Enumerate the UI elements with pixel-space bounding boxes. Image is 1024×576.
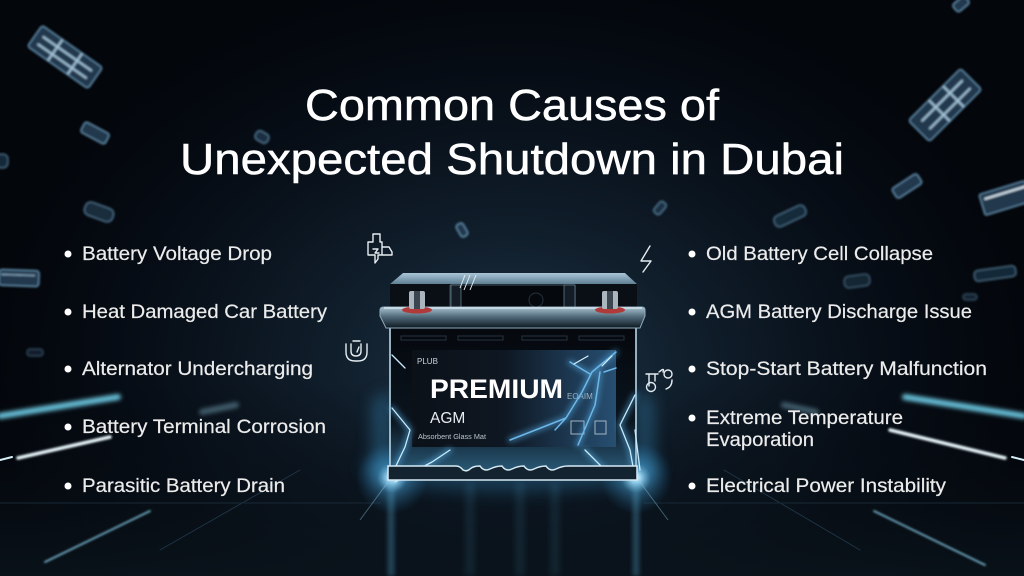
battery label xyxy=(412,350,616,447)
right list of causes: AGM Battery Discharge Issue xyxy=(706,301,972,323)
floating battery debris xyxy=(0,0,1024,356)
battery label: Absorbent Glass Mat xyxy=(418,434,486,441)
title: Unexpected Shutdown in Dubai xyxy=(180,135,844,184)
right list of causes xyxy=(688,243,987,497)
left list of causes: Battery Terminal Corrosion xyxy=(82,416,326,438)
battery label: AGM xyxy=(430,410,465,427)
battery top lid xyxy=(380,273,645,328)
right list of causes: Old Battery Cell Collapse xyxy=(706,243,933,265)
left list of causes xyxy=(64,243,327,497)
lightning xyxy=(392,352,640,482)
left list of causes: Battery Voltage Drop xyxy=(82,243,272,265)
right list of causes: Evaporation xyxy=(706,429,814,451)
battery label: PREMIUM xyxy=(430,374,563,404)
light streaks xyxy=(0,397,1024,565)
battery body xyxy=(390,326,636,472)
battery glow xyxy=(345,390,690,576)
battery label: EOAIM xyxy=(567,392,593,401)
right list of causes: Electrical Power Instability xyxy=(706,475,946,497)
icon: plug and car xyxy=(368,234,392,263)
battery xyxy=(380,273,645,482)
right list of causes: Stop-Start Battery Malfunction xyxy=(706,358,987,380)
left list of causes: Heat Damaged Car Battery xyxy=(82,301,327,323)
title: Common Causes of xyxy=(305,81,720,130)
icon: gauge shield xyxy=(346,341,367,361)
icon: lightning bolt xyxy=(641,246,651,272)
battery label: PLUB xyxy=(417,357,438,366)
battery vents xyxy=(401,336,624,340)
left list of causes: Parasitic Battery Drain xyxy=(82,475,285,497)
right list of causes: Extreme Temperature xyxy=(706,407,903,429)
battery base xyxy=(388,466,637,480)
title xyxy=(180,81,844,184)
icon: temperature gears xyxy=(646,370,672,392)
battery terminals xyxy=(402,291,625,314)
left list of causes: Alternator Undercharging xyxy=(82,358,313,380)
